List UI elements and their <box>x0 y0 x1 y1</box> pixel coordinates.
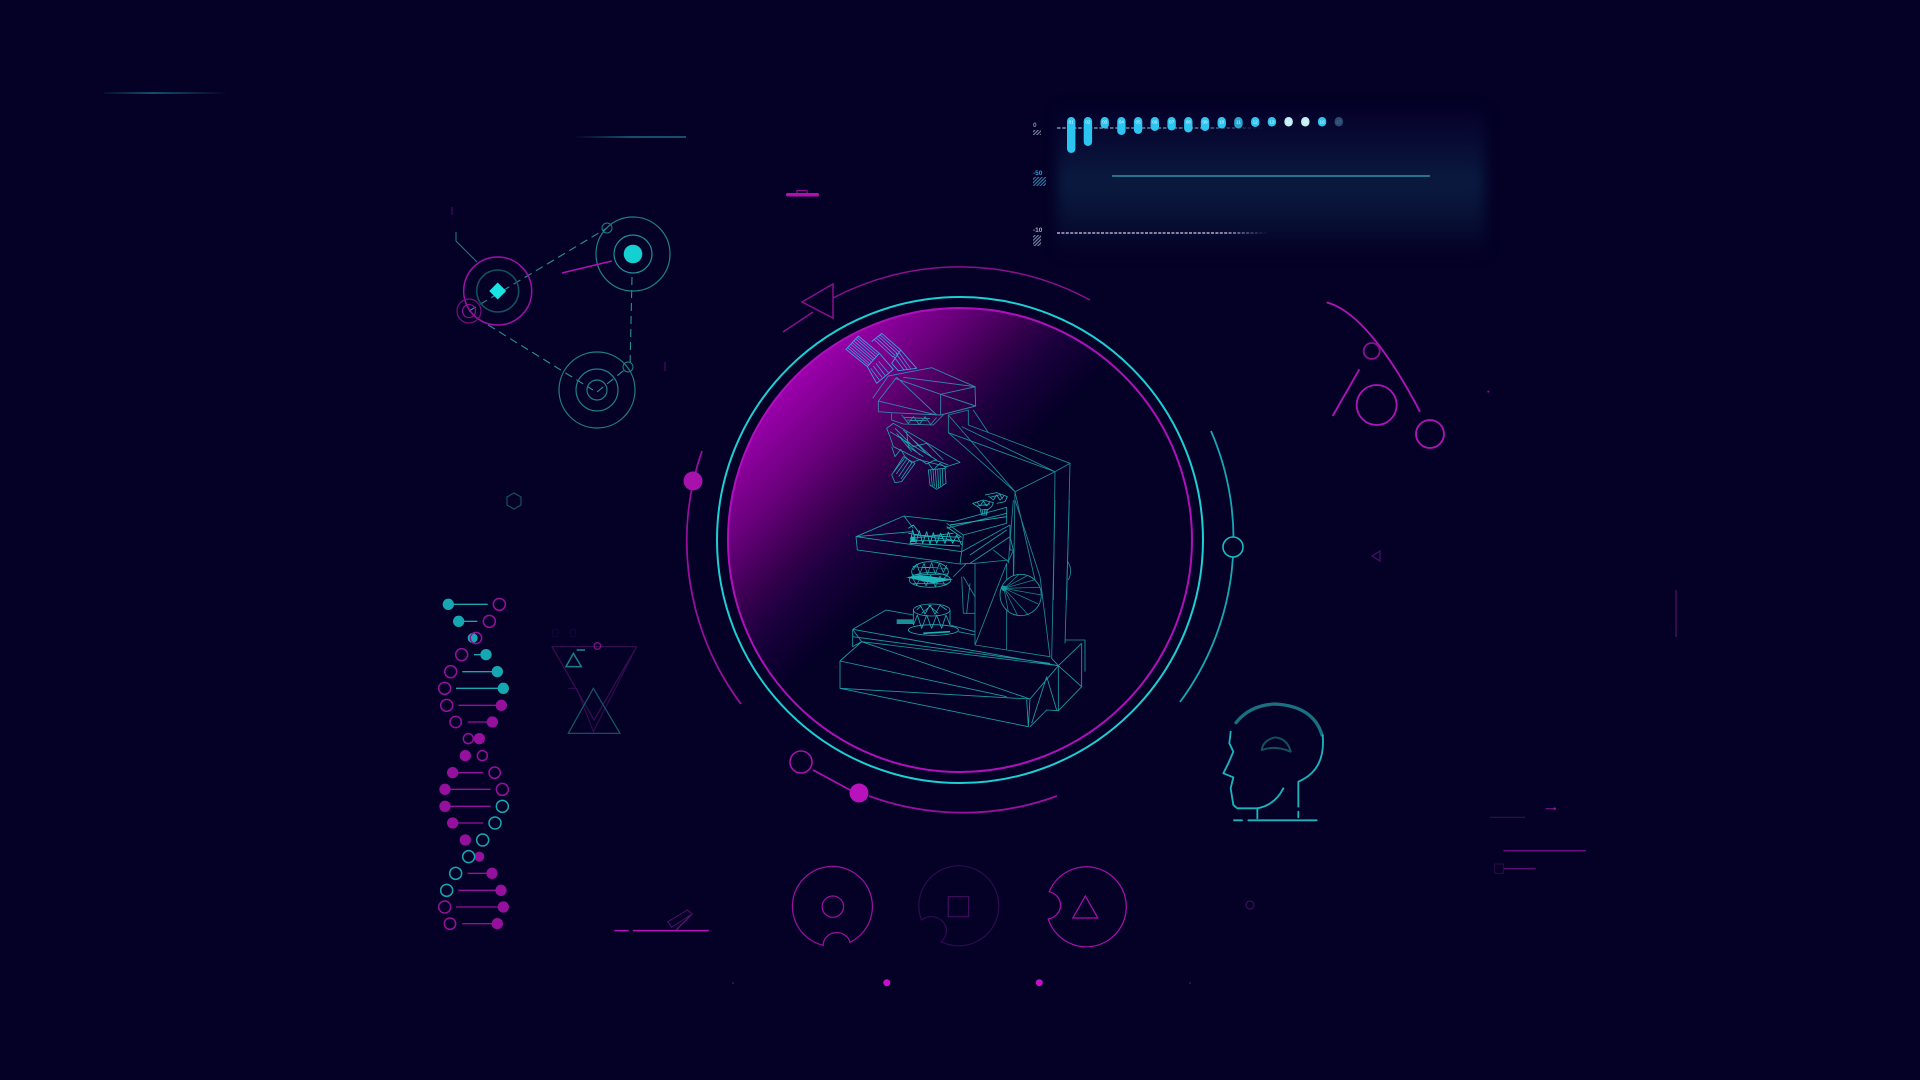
arm <box>948 410 1070 492</box>
teal hollow beads <box>441 800 508 896</box>
magenta rungs <box>450 705 499 924</box>
microscope upper: eyepieces, head, nosepiece, arm <box>846 333 1070 600</box>
panel glow <box>1057 108 1485 254</box>
condenser <box>906 562 953 587</box>
eyepieces <box>846 333 917 383</box>
microscope wireframe <box>840 333 1085 727</box>
pill numbers: 11 <box>1236 120 1241 124</box>
pill numbers: 16 <box>1320 120 1325 124</box>
dashed minus line <box>1057 232 1268 234</box>
stage <box>856 507 1013 564</box>
central lens: magenta gradient disc <box>728 308 1192 772</box>
vertical accent line <box>1675 590 1677 637</box>
pill numbers: 01 <box>1069 120 1074 124</box>
stand lower column <box>953 500 1069 658</box>
base lower <box>840 640 1085 727</box>
pill numbers: 14 <box>1286 120 1292 124</box>
axis labels: -10 <box>1033 227 1043 234</box>
pill numbers <box>1069 120 1342 124</box>
pill numbers: 03 <box>1102 120 1108 124</box>
magenta hollow beads <box>439 598 508 929</box>
axis labels: -50 <box>1033 170 1043 177</box>
pill numbers: 07 <box>1169 120 1175 124</box>
icon: small magenta slider <box>786 190 819 196</box>
axis labels <box>1033 122 1043 234</box>
pills <box>1067 117 1343 153</box>
pill numbers: 06 <box>1152 120 1158 124</box>
pill numbers: 12 <box>1253 120 1258 124</box>
outer orbit: top arc with triangle <box>783 267 1090 332</box>
focus knob <box>1000 574 1042 616</box>
network diagram: three orbit nodes <box>452 207 670 428</box>
central lens: cyan ring <box>717 297 1203 783</box>
small ticks <box>452 207 665 371</box>
lower-right dim lines <box>1490 807 1586 873</box>
chart panel: pill depth chart <box>1033 108 1485 254</box>
node: concentric rings <box>559 352 635 428</box>
teal leader <box>456 232 477 262</box>
axis labels: 0 <box>1033 122 1037 129</box>
faint triangle glyph group <box>552 629 637 733</box>
right knob <box>1068 562 1071 580</box>
pill numbers: 08 <box>1186 120 1191 124</box>
junction markers <box>602 223 633 372</box>
binocular head <box>873 368 976 415</box>
dashed zero line <box>1057 127 1265 129</box>
bottom dial: circle <box>792 866 872 945</box>
hatched legend swatches <box>1033 130 1046 246</box>
top accent line <box>575 136 686 138</box>
nose mount <box>892 413 943 425</box>
pill numbers: 10 <box>1219 120 1225 124</box>
node: diamond <box>457 257 532 325</box>
column top <box>1013 463 1070 600</box>
outer orbit: bottom arc with slider <box>790 751 1057 813</box>
microscope lower: stage, condenser, knob, base <box>840 493 1085 727</box>
top-left accent line <box>104 92 226 94</box>
node: filled circle <box>596 217 670 291</box>
right arc cluster with rings <box>1327 302 1489 448</box>
dashed connectors <box>469 228 632 392</box>
pill numbers: 05 <box>1136 120 1141 124</box>
nosepiece and objectives <box>887 423 960 489</box>
stage knobs <box>973 493 1007 515</box>
pill numbers: 17 <box>1336 120 1342 124</box>
icon: human head profile <box>1223 704 1323 820</box>
bottom dial: square (dim) <box>919 866 999 946</box>
bottom-left baseline with tag <box>614 910 709 931</box>
outer orbit: left arc with node <box>684 451 741 704</box>
pill numbers: 15 <box>1303 120 1308 124</box>
teal reference line <box>1112 175 1430 177</box>
pill numbers: 13 <box>1269 120 1275 124</box>
base upper <box>853 610 1058 666</box>
bottom dots <box>732 979 1191 986</box>
teal beads <box>443 599 509 694</box>
magenta pointer <box>562 261 612 273</box>
stage mesh <box>908 517 1007 546</box>
pill numbers: 09 <box>1202 120 1208 124</box>
DNA helix <box>439 598 509 929</box>
small ring <box>1246 901 1254 909</box>
icon: hexagon <box>507 493 521 509</box>
turret <box>897 604 958 635</box>
bottom dial: triangle <box>1048 867 1126 947</box>
pill numbers: 02 <box>1085 120 1091 124</box>
brain outline <box>1262 737 1291 752</box>
outer orbit: right arc with ring <box>1180 431 1243 702</box>
pill numbers: 04 <box>1119 120 1124 124</box>
icon: small triangle <box>1372 551 1380 561</box>
teal rungs <box>453 604 499 688</box>
magenta beads <box>439 700 509 929</box>
